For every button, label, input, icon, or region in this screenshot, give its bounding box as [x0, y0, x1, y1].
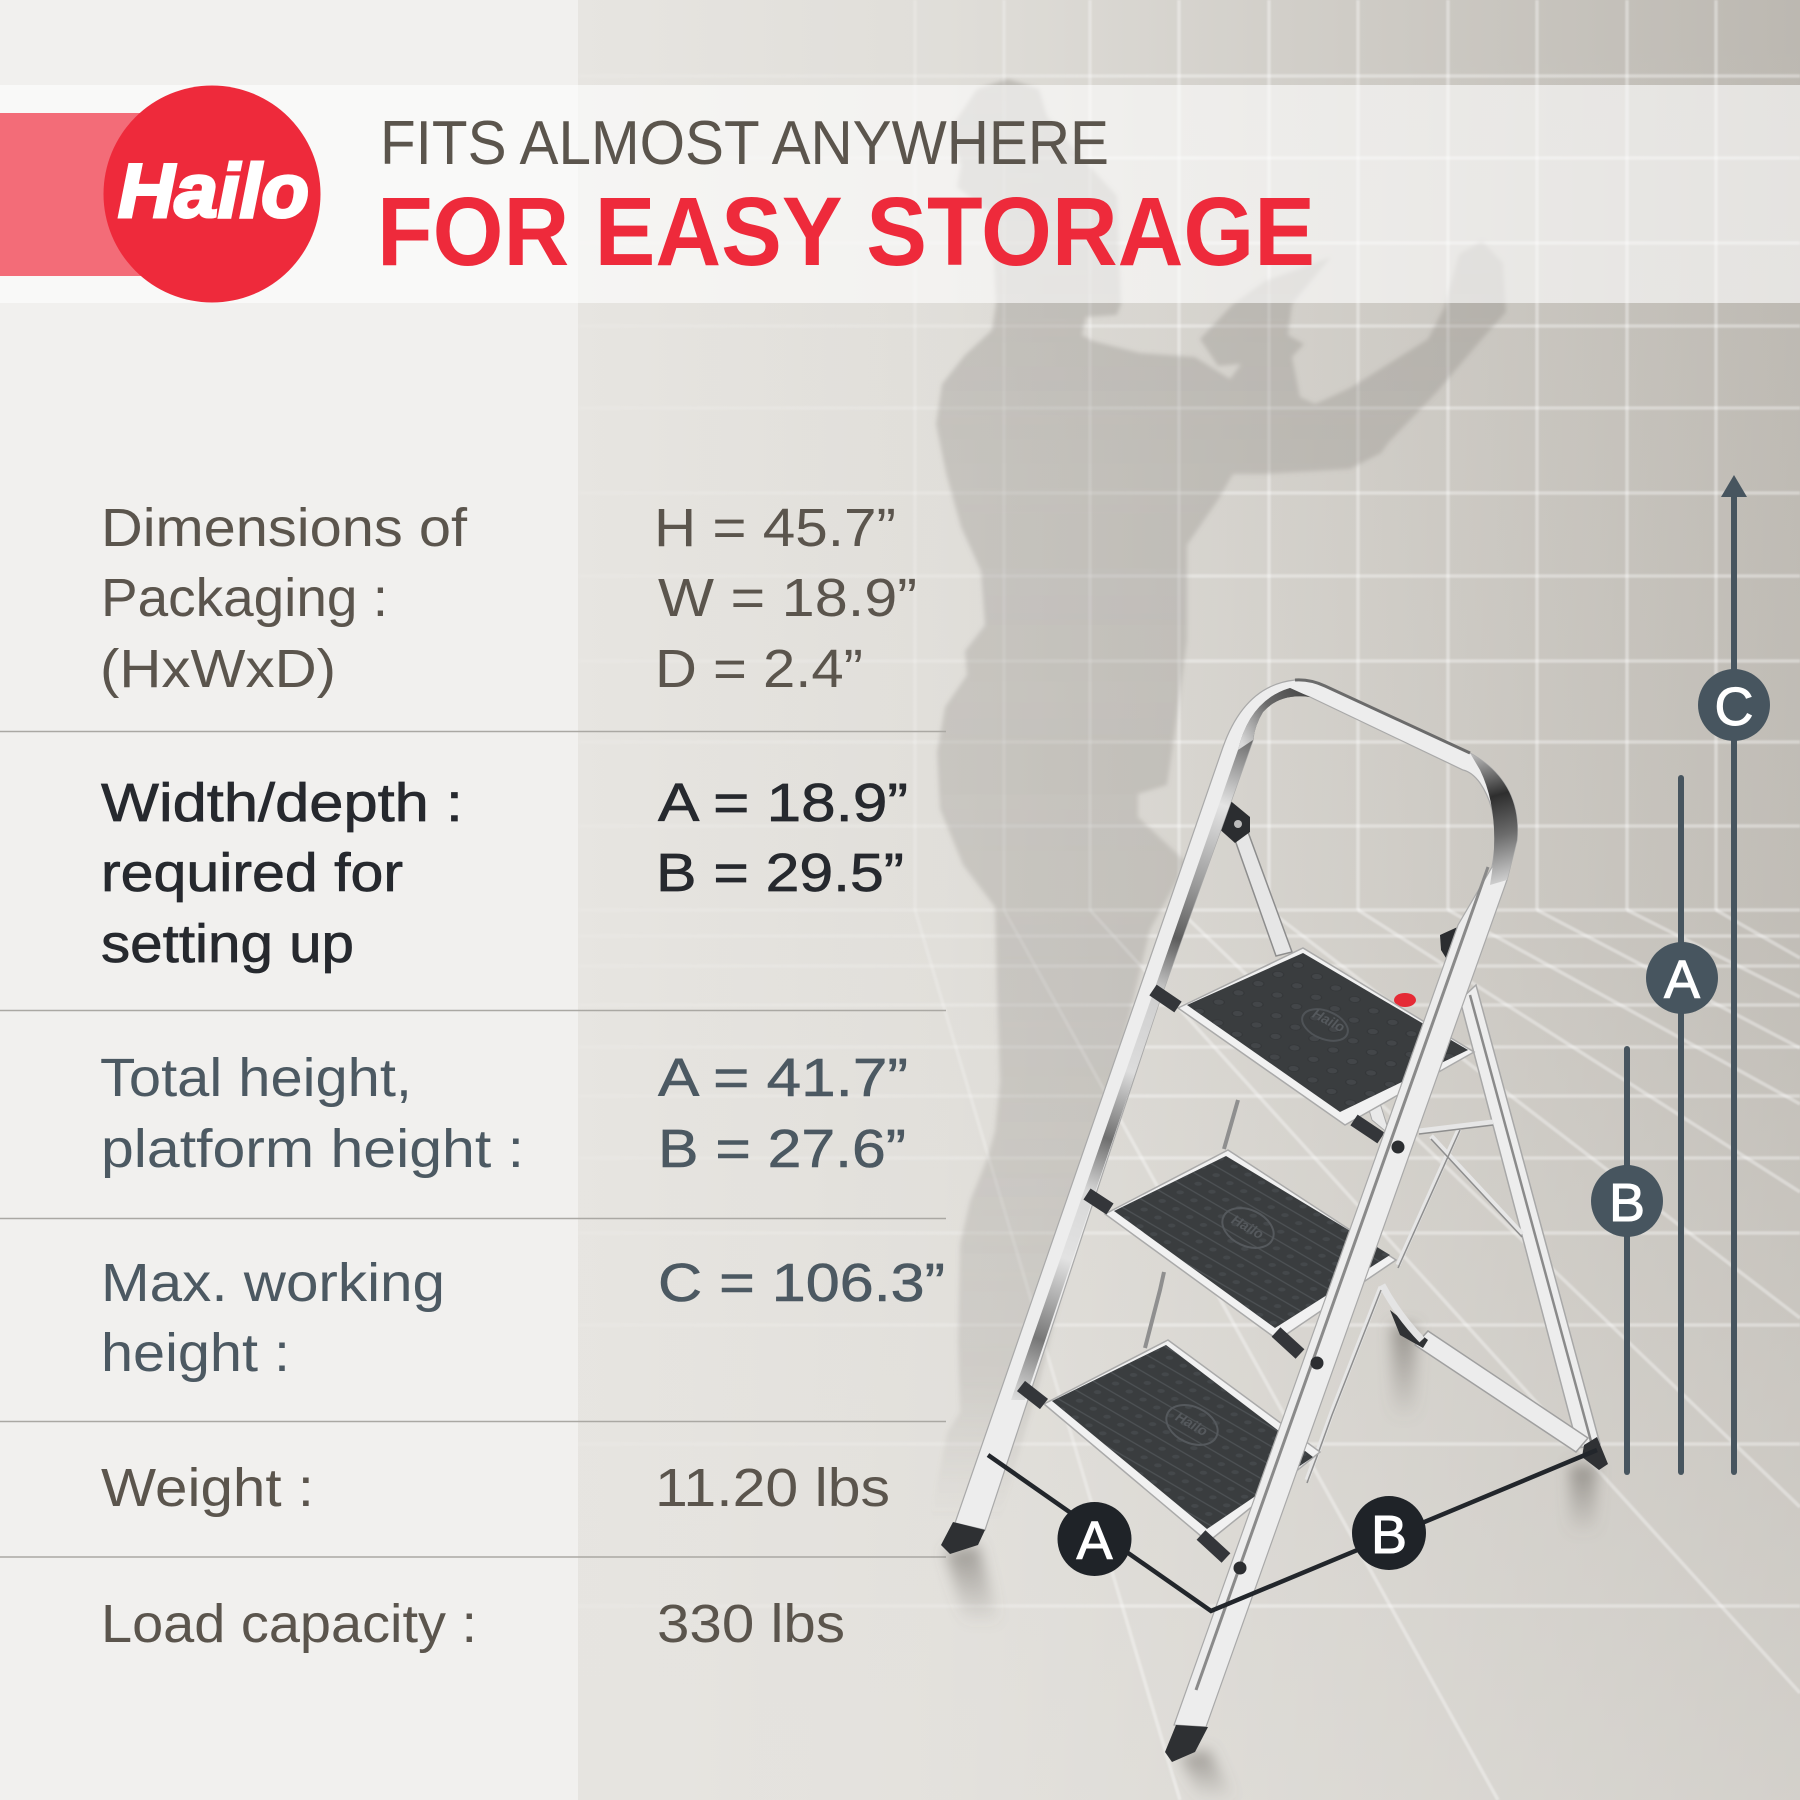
spec row: weight: 11.20 lbs [655, 1458, 890, 1518]
top step: Hailo [1310, 1005, 1348, 1036]
spec row: dimensions of packaging: H = 45.7” [654, 498, 896, 558]
spec row: weight [101, 1458, 890, 1518]
floor lines [988, 1450, 1597, 1611]
rear step brackets on left rail [1021, 990, 1178, 1404]
front step brackets [1201, 1120, 1381, 1558]
step ladder [941, 680, 1608, 1762]
logo: Hailo [0, 86, 320, 302]
height dimension lines [1591, 475, 1770, 1472]
title line 2: FOR EASY STORAGE [377, 177, 1315, 286]
badge B: B [1371, 1505, 1407, 1565]
spec row: dimensions of packaging [100, 498, 917, 699]
spec row: total and platform height [100, 1048, 908, 1179]
spec row: width and depth: Width/depth : [101, 773, 463, 833]
spec row: dimensions of packaging: (HxWxD) [100, 639, 336, 699]
background: tiled room [578, 0, 1800, 1800]
red accent bar [0, 113, 150, 276]
spec row: dimensions of packaging: D = 2.4” [655, 639, 863, 699]
dimension A: A [1664, 950, 1700, 1010]
dimension C with arrow [1698, 475, 1770, 1472]
floor shadows [945, 1325, 1596, 1800]
front feet [941, 1522, 1208, 1762]
logo wordmark: Hailo [118, 149, 309, 234]
spec row: total and platform height: Total height, [100, 1048, 412, 1108]
spec row: dimensions of packaging: Packaging : [101, 568, 388, 628]
middle step: Hailo [1229, 1211, 1267, 1242]
rivets [1234, 1140, 1404, 1574]
spec row: load capacity: Load capacity : [101, 1594, 477, 1654]
dimension C with arrow: C [1714, 677, 1754, 737]
bottom step [1044, 1340, 1320, 1542]
spec row: weight: Weight : [101, 1458, 314, 1518]
left panel [0, 0, 578, 1800]
rear leg and braces [1145, 925, 1608, 1483]
badge A [1058, 1502, 1132, 1576]
spec row: max working height: Max. working [101, 1253, 445, 1313]
red lock button [1394, 993, 1416, 1007]
spec row: width and depth: setting up [101, 914, 354, 974]
spec row: max working height: C = 106.3” [658, 1253, 945, 1313]
main frame tube [955, 680, 1517, 1727]
title [377, 109, 1315, 286]
spec row: total and platform height: A = 41.7” [658, 1048, 908, 1108]
red circle [104, 86, 320, 302]
table dividers [0, 732, 946, 1557]
spec row: total and platform height: platform height : [101, 1119, 524, 1179]
footprint dimension lines [988, 1450, 1597, 1611]
title line 1: FITS ALMOST ANYWHERE [380, 109, 1109, 178]
spec row: dimensions of packaging: W = 18.9” [658, 568, 917, 628]
folding arm and joint [1214, 798, 1292, 956]
top step [1178, 948, 1474, 1125]
header band [0, 85, 1800, 303]
badge A: A [1076, 1511, 1113, 1571]
spec row: load capacity [101, 1594, 845, 1654]
dimension A [1646, 778, 1718, 1472]
spec row: width and depth: B = 29.5” [656, 843, 904, 903]
spec row: load capacity: 330 lbs [657, 1594, 845, 1654]
spec row: width and depth [101, 773, 908, 974]
middle step [1105, 1150, 1396, 1340]
dimension B: B [1609, 1173, 1645, 1233]
spec row: dimensions of packaging: Dimensions of [101, 498, 468, 558]
spec row: max working height [101, 1253, 945, 1383]
silhouette of person reaching up [930, 79, 1506, 1520]
spec row: width and depth: required for [101, 843, 403, 903]
bottom step: Hailo [1173, 1408, 1211, 1439]
spec row: max working height: height : [101, 1323, 290, 1383]
badge B [1352, 1496, 1426, 1570]
metal highlights on frame [1011, 680, 1517, 1690]
spec row: width and depth: A = 18.9” [658, 773, 908, 833]
dimension B [1591, 1049, 1663, 1472]
spec row: total and platform height: B = 27.6” [658, 1119, 906, 1179]
